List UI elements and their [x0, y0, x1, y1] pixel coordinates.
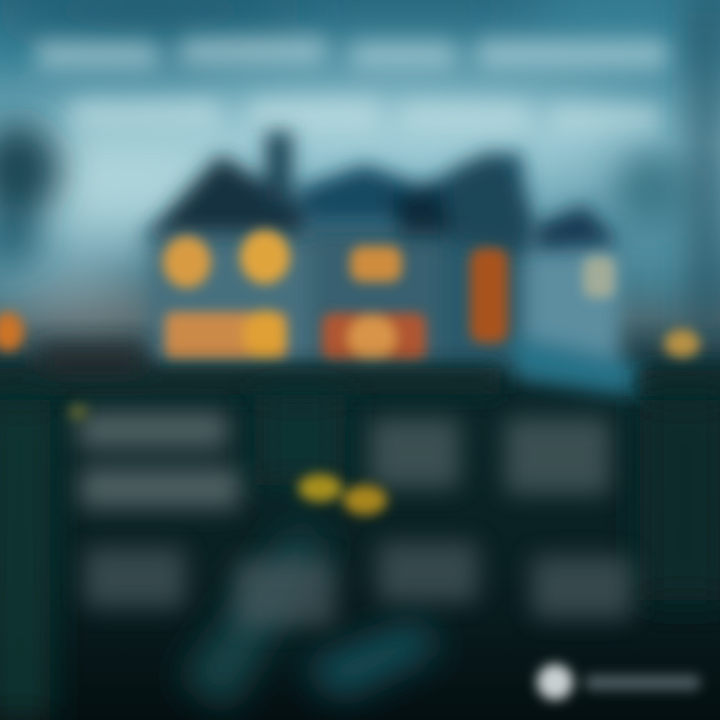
- text panel blurred: row two: [85, 542, 632, 626]
- text panel blurred: row one right: [370, 418, 610, 494]
- sky glow: [0, 0, 720, 321]
- small yellow accent: [68, 404, 88, 420]
- foreground foliage: [0, 395, 720, 720]
- yellow highlight flowers: [298, 474, 387, 515]
- lit windows: [163, 230, 615, 361]
- roofs: [138, 132, 620, 255]
- hedge line: [0, 345, 720, 396]
- left and right trees: [0, 0, 717, 340]
- headline text blurred: [35, 38, 670, 132]
- house: [0, 132, 700, 398]
- logo watermark: [537, 664, 700, 700]
- house body: [150, 210, 640, 398]
- text panel blurred: row one left: [78, 412, 240, 508]
- distant lights: [0, 312, 700, 359]
